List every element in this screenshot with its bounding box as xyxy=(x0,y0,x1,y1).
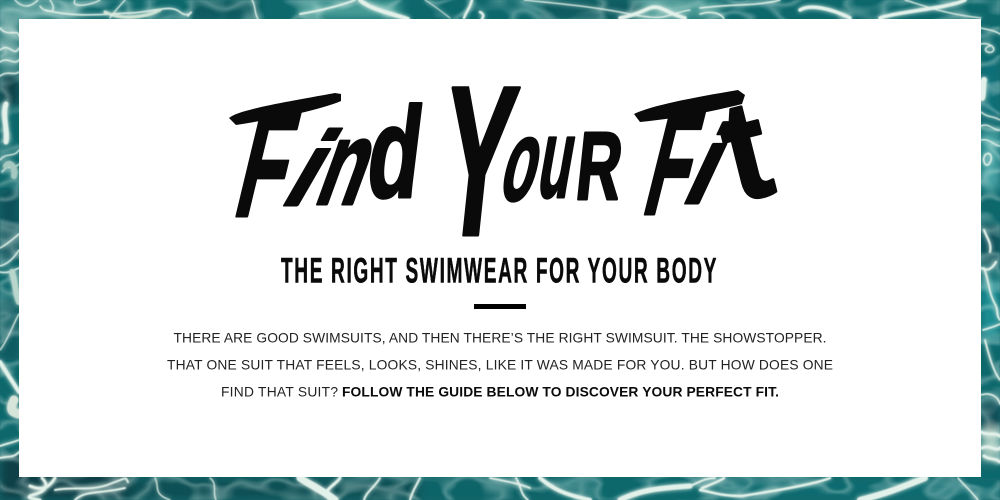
word: Your: o xyxy=(491,96,557,225)
word: Fit xyxy=(632,69,785,246)
word: Your: u xyxy=(531,95,586,221)
word: Find: F xyxy=(223,81,311,249)
word: Find xyxy=(223,81,430,249)
word: Find: n xyxy=(303,96,396,229)
word: Fit: i xyxy=(668,103,752,227)
title: Find Your Fit xyxy=(223,42,785,282)
line 3: FIND THAT SUIT? xyxy=(221,384,338,400)
word: Your xyxy=(430,42,627,282)
word: Find: d xyxy=(361,82,430,225)
line 3: FOLLOW THE GUIDE BELOW TO DISCOVER YOUR PERFECT FIT. xyxy=(342,384,779,400)
brush bar of first F xyxy=(229,93,341,125)
line 1: THERE ARE GOOD SWIMSUITS, AND THEN THERE’S THE RIGHT SWIMSUIT. THE SHOWSTOPPER. xyxy=(174,331,826,346)
brush bar of second F xyxy=(634,90,745,122)
word: Your: Y xyxy=(430,42,527,282)
intro paragraph xyxy=(167,331,833,400)
word: Your: R xyxy=(572,114,627,220)
word: Fit: t xyxy=(706,69,785,232)
line 2: THAT ONE SUIT THAT FEELS, LOOKS, SHINES, LIKE IT WAS MADE FOR YOU. BUT HOW DOES ONE xyxy=(167,358,833,372)
word: Fit: F xyxy=(632,82,715,246)
divider bar xyxy=(474,304,526,309)
word: Find: i xyxy=(265,111,358,228)
